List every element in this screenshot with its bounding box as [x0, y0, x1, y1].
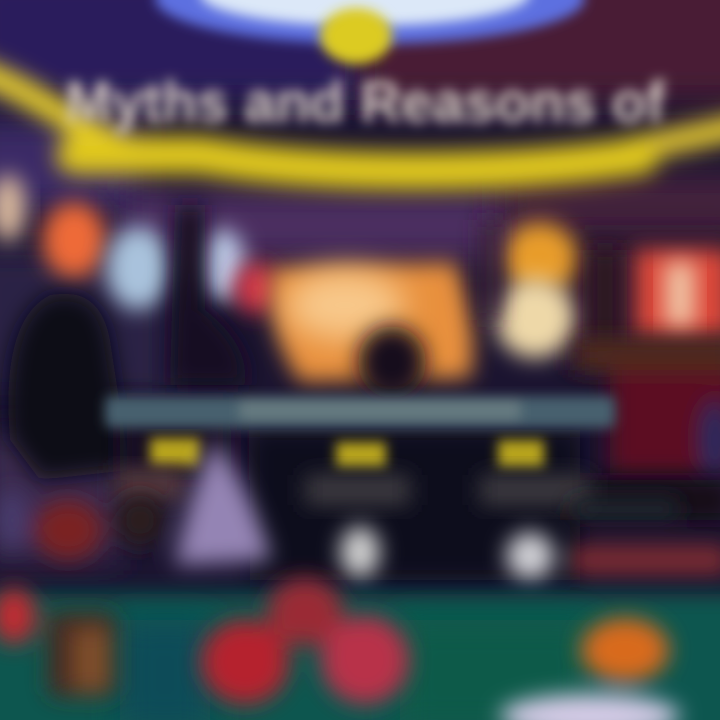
silhouette: left person [8, 293, 130, 480]
light: red [234, 262, 278, 314]
light: large orange screen [271, 262, 473, 382]
table bar [105, 396, 615, 428]
light: orange [42, 202, 106, 278]
lower dark area [120, 400, 720, 580]
silhouette: centre person [358, 326, 426, 398]
label: yellow right [498, 440, 544, 468]
label: yellow centre [336, 442, 386, 468]
ceiling light [155, 0, 585, 64]
green table felt [0, 594, 720, 720]
light: yellow white lamp [502, 222, 578, 294]
lavender pillar [175, 440, 272, 565]
silhouettes [8, 205, 620, 480]
yellow curved banner [0, 72, 720, 171]
label: yellow left [150, 438, 200, 466]
die: red left [201, 620, 289, 704]
light: pale blue [106, 226, 170, 310]
silhouette: middle left person [170, 205, 246, 385]
red chips left [34, 500, 102, 560]
icon: yellow lamp [320, 8, 392, 64]
title: Myths and Reasons of [65, 70, 666, 135]
grey text blocks [115, 470, 590, 505]
lavender bottom glow [500, 694, 680, 720]
glowing lights row [0, 174, 720, 382]
red stacks right [570, 545, 720, 575]
die: red top [267, 578, 343, 646]
light: left white [0, 174, 26, 242]
chip stack: brown [48, 612, 116, 697]
chip: orange [581, 618, 669, 682]
pale pillars [0, 440, 720, 580]
dice and chips [0, 578, 680, 720]
right maroon wall [575, 340, 720, 480]
light: white blue [198, 229, 246, 301]
chip: red left edge [0, 588, 36, 644]
white pillar centre [340, 526, 380, 578]
die: red right [321, 616, 409, 704]
white pillar right [506, 532, 554, 580]
light: red white panel [635, 250, 720, 335]
yellow labels [150, 438, 544, 468]
